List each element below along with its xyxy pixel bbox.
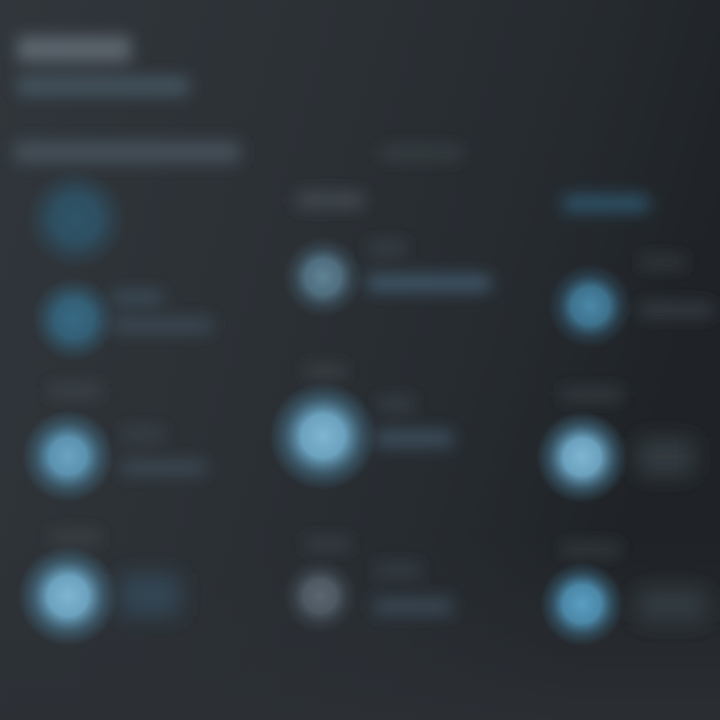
text line <box>640 257 685 267</box>
text block row 4 <box>120 574 180 616</box>
label row 2 <box>305 366 345 376</box>
text block row 3 <box>638 588 706 622</box>
text block row 2 <box>376 399 452 446</box>
icon: grey-blue circle row 1 <box>283 237 363 317</box>
column 2 <box>269 147 490 633</box>
label row 2 <box>562 389 622 400</box>
description line <box>14 141 240 163</box>
icon: bright circle row 3 <box>22 410 114 502</box>
title <box>17 36 131 62</box>
text block row 1 <box>640 303 712 317</box>
text block row 3 <box>374 565 452 614</box>
column 3 <box>536 196 712 646</box>
column heading <box>564 196 648 211</box>
text block row 2 <box>638 438 694 476</box>
icon: grey circle row 3 <box>283 559 357 633</box>
text block row 1 <box>368 243 490 291</box>
text block row 2 <box>112 292 212 332</box>
label row 3 <box>305 539 350 549</box>
icon: bright circle row 2 <box>269 382 377 490</box>
icon: blue circle row 3 <box>540 562 624 646</box>
label row 4 <box>50 532 100 542</box>
icon: bright circle row 4 <box>18 546 118 646</box>
icon: large teal circle <box>26 169 126 269</box>
label row 3 <box>562 544 620 554</box>
icon: bright circle row 2 <box>536 411 628 503</box>
column 1 <box>18 169 212 646</box>
subtitle <box>17 77 189 95</box>
header <box>14 36 240 163</box>
label row 3 <box>50 385 100 396</box>
column heading <box>382 147 460 159</box>
icon: blue circle row 1 <box>548 264 632 348</box>
label row 1 <box>297 193 363 207</box>
icon: teal circle row 2 <box>32 277 116 361</box>
text block row 3 <box>122 429 206 474</box>
